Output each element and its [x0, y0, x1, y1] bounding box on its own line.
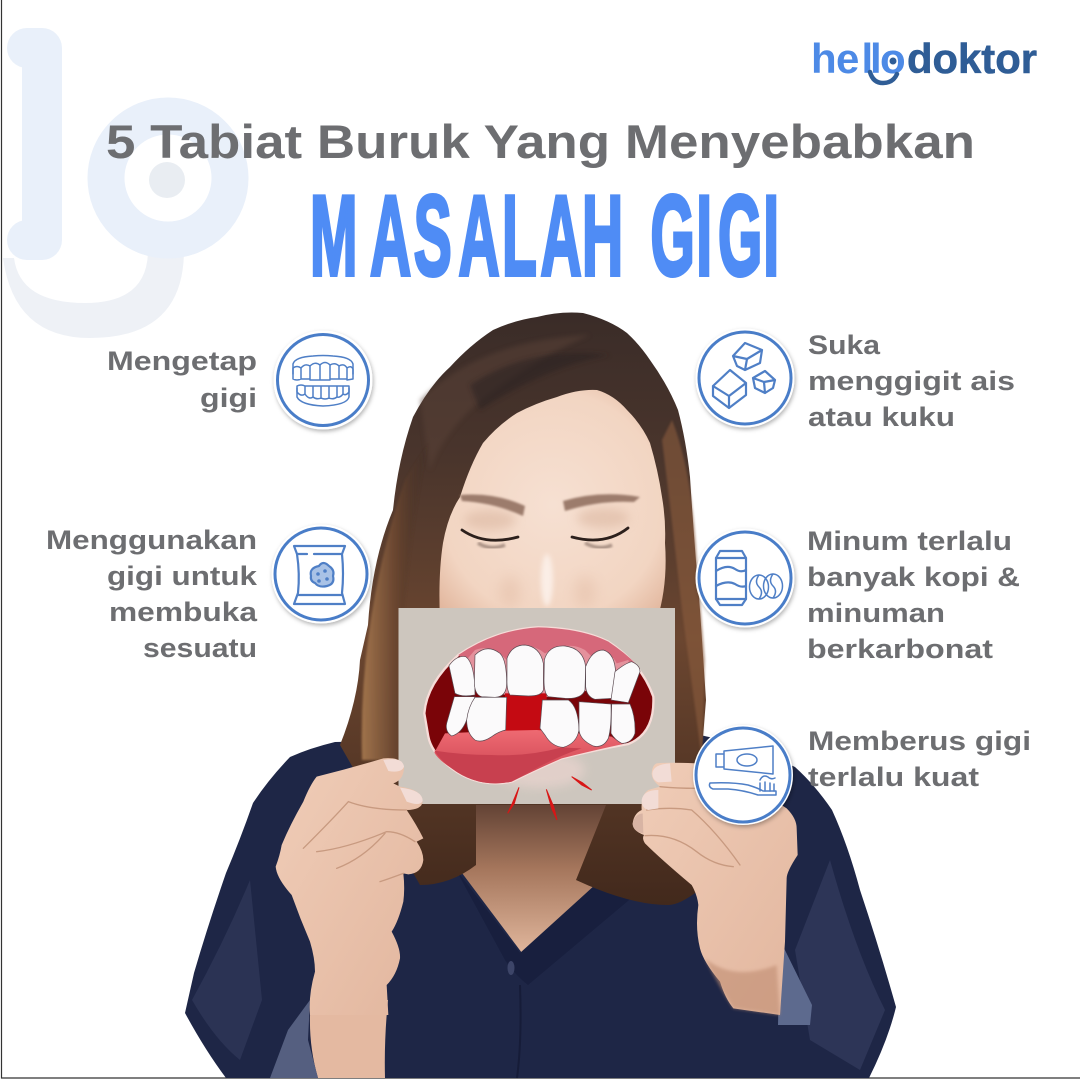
label: Menggunakan gigi untuk membuka sesuatu	[46, 525, 258, 663]
eye shadows	[464, 510, 516, 530]
logo: hellodoktor: hello	[811, 35, 906, 82]
left hand	[276, 758, 423, 1015]
icon: snack packet	[272, 524, 370, 624]
label: Minum terlalu banyak kopi & minuman berkarbonat	[807, 526, 1020, 664]
logo: hellodoktor	[811, 35, 1037, 83]
label: Minum terlalu banyak kopi & minuman berkarbonat: banyak kopi &	[807, 562, 1020, 592]
label: Menggunakan gigi untuk membuka sesuatu: membuka	[109, 597, 258, 627]
tongue and lower lip	[434, 730, 623, 783]
lower teeth	[446, 697, 635, 747]
right cuff	[778, 940, 812, 1025]
label: Memberus gigi terlalu kuat: Memberus gigi	[808, 726, 1031, 756]
hair lit strands	[362, 440, 430, 760]
face	[439, 390, 666, 620]
icon: soda can and coffee beans	[696, 528, 794, 628]
neck and chest	[462, 800, 610, 953]
label: Menggunakan gigi untuk membuka sesuatu: sesuatu	[143, 633, 257, 663]
label: Mengetap gigi: gigi	[200, 383, 257, 413]
label: Mengetap gigi	[107, 346, 257, 413]
label: Mengetap gigi: Mengetap	[107, 346, 257, 376]
right hand	[633, 763, 798, 1015]
label: Memberus gigi terlalu kuat: terlalu kuat	[808, 762, 979, 792]
upper teeth	[449, 645, 640, 703]
label: Memberus gigi terlalu kuat	[808, 726, 1031, 792]
left cuff	[270, 1000, 318, 1078]
label: Minum terlalu banyak kopi & minuman berkarbonat: Minum terlalu	[807, 526, 1012, 556]
icon: ice cubes	[696, 328, 794, 428]
label: Suka menggigit ais atau kuku: Suka	[808, 330, 881, 360]
title line 2: MASALAH GIGI	[310, 173, 779, 300]
collar	[455, 868, 635, 985]
label: Menggunakan gigi untuk membuka sesuatu: Menggunakan	[46, 525, 257, 555]
shirt	[185, 735, 896, 1078]
label: Suka menggigit ais atau kuku: menggigit ais	[808, 366, 1015, 396]
mouth drawing	[424, 627, 653, 820]
icon: teeth	[274, 330, 372, 430]
label: Menggunakan gigi untuk membuka sesuatu: gigi untuk	[107, 561, 258, 591]
card with mouth illustration	[398, 608, 675, 820]
logo: hellodoktor: doktor	[907, 35, 1037, 82]
hair	[340, 312, 706, 905]
watermark logo	[3, 48, 230, 338]
label: Minum terlalu banyak kopi & minuman berkarbonat: berkarbonat	[807, 634, 993, 664]
eyebrows	[460, 494, 525, 516]
label: Suka menggigit ais atau kuku: atau kuku	[808, 402, 955, 432]
woman photo illustration	[185, 312, 896, 1078]
icon: toothpaste and toothbrush	[693, 725, 793, 825]
left forearm	[310, 1000, 388, 1078]
closed eyes	[462, 530, 518, 540]
button and placket	[508, 961, 514, 975]
label: Suka menggigit ais atau kuku	[808, 330, 1015, 432]
title line 1: 5 Tabiat Buruk Yang Menyebabkan	[106, 115, 975, 168]
sleeve highlights	[192, 880, 262, 1060]
label: Minum terlalu banyak kopi & minuman berkarbonat: minuman	[807, 598, 945, 628]
pain marks	[508, 787, 519, 813]
